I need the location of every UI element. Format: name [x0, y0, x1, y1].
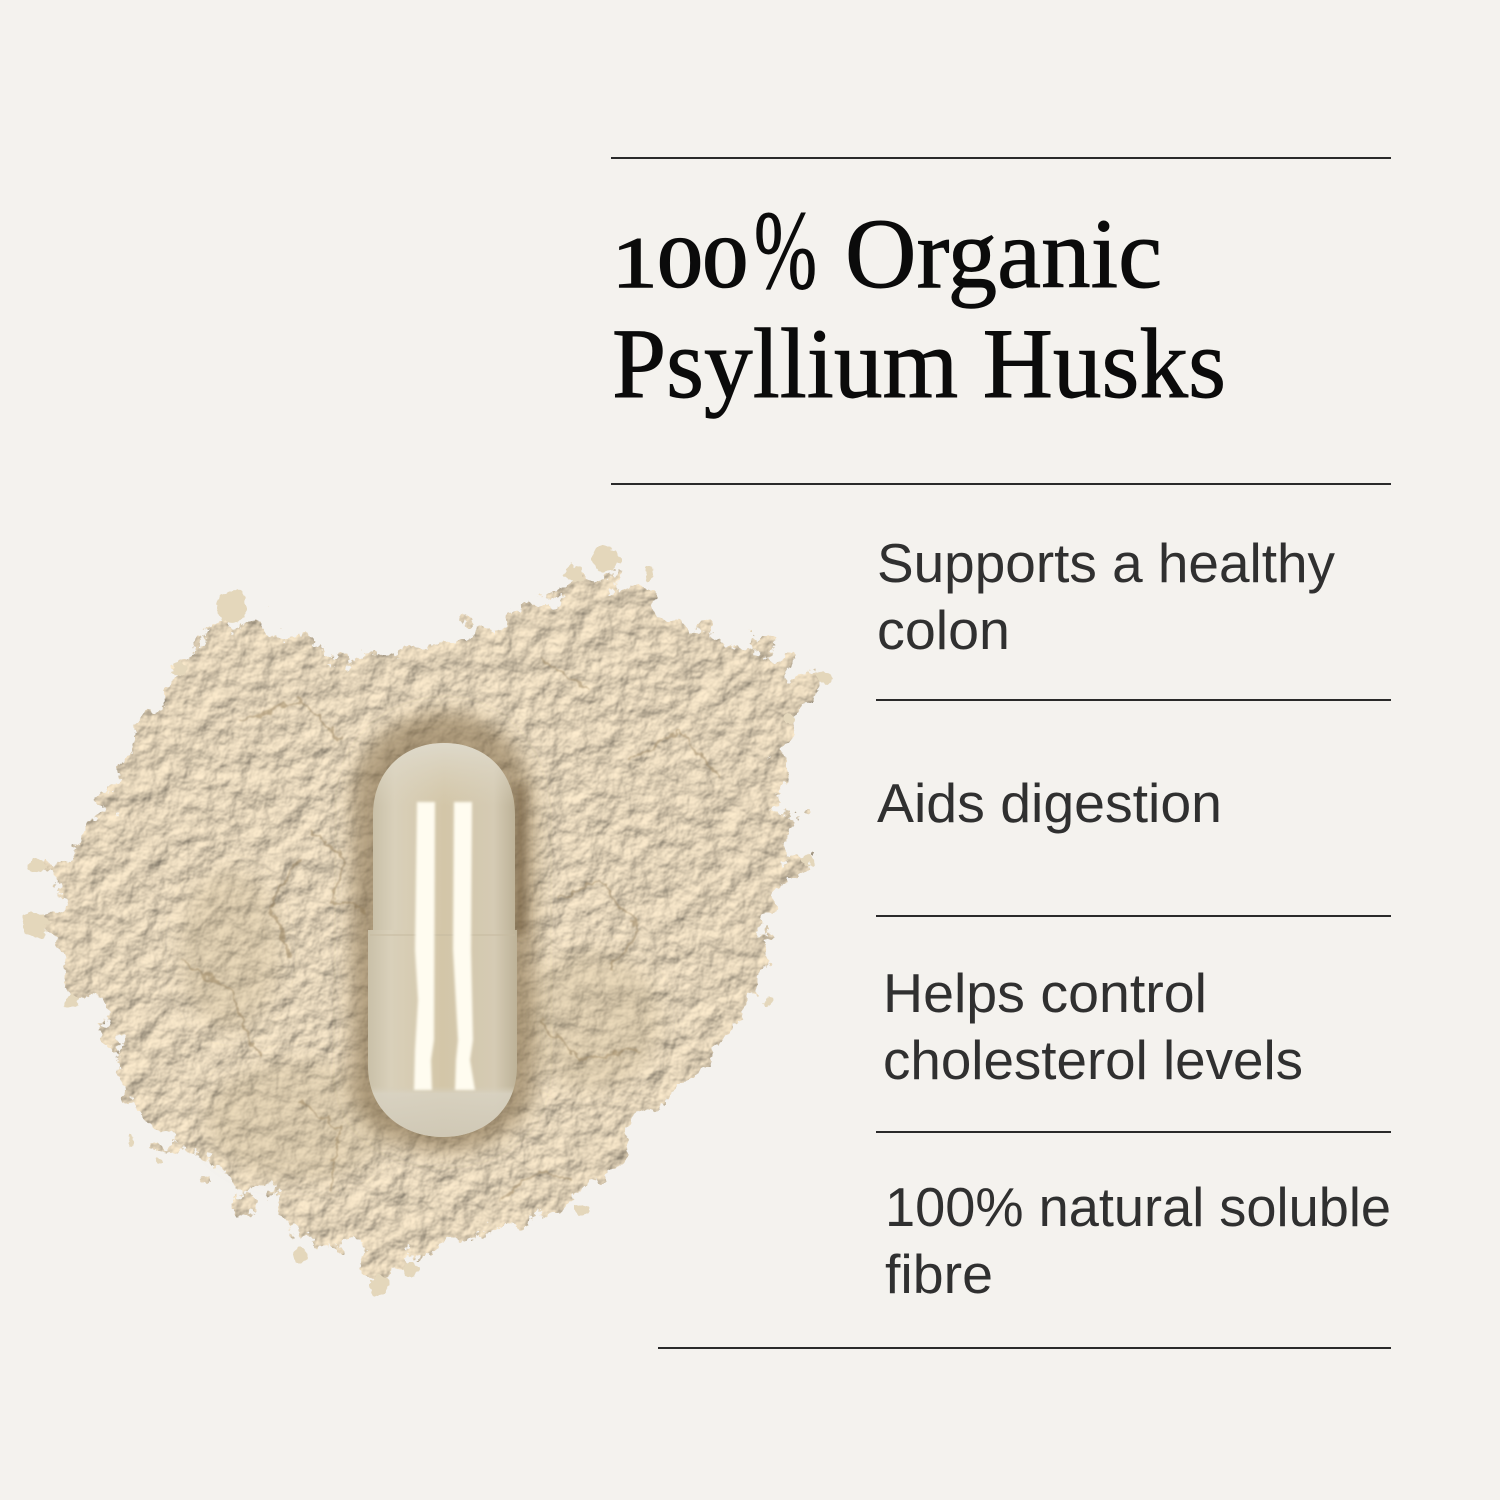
divider bottom — [658, 1347, 1391, 1349]
benefit 1: Supports a healthy — [877, 532, 1335, 594]
title: numerals: 100 — [612, 223, 748, 303]
divider 3 — [876, 1131, 1391, 1133]
powder: darker lower patches — [180, 870, 660, 1180]
powder pile image — [23, 547, 832, 1295]
benefit 3: cholesterol levels — [883, 1029, 1303, 1091]
divider 2 — [876, 915, 1391, 917]
benefit 4: 100% natural soluble — [885, 1176, 1391, 1238]
powder: cracks — [180, 660, 720, 1200]
capsule — [368, 743, 517, 1137]
benefit 3: Helps control — [883, 962, 1207, 1024]
benefit 1: colon — [877, 599, 1010, 661]
benefit 4: fibre — [885, 1243, 993, 1305]
powder: main heap — [50, 575, 815, 1275]
divider under title — [611, 483, 1391, 485]
title: percent sign: % — [754, 189, 817, 313]
benefit 3 — [883, 962, 1303, 1091]
title: word Organic: Organic — [845, 198, 1162, 309]
title: second line: Psyllium Husks — [612, 308, 1226, 419]
capsule: right highlight — [453, 802, 475, 1090]
capsule: end tints — [368, 743, 517, 1137]
capsule: seam — [370, 934, 515, 936]
capsule shadow — [350, 712, 535, 1152]
capsule: lower shell — [368, 930, 517, 1137]
capsule: left highlight — [414, 802, 435, 1090]
benefit 1 — [877, 532, 1335, 661]
capsule: upper shell — [373, 743, 515, 930]
divider 1 — [876, 699, 1391, 701]
title — [612, 189, 1226, 419]
benefit 2: Aids digestion — [877, 772, 1222, 834]
divider top — [611, 157, 1391, 159]
powder: stray crumbs — [23, 547, 832, 1295]
capsule right dark edge — [514, 785, 526, 935]
benefit 4 — [885, 1176, 1391, 1305]
